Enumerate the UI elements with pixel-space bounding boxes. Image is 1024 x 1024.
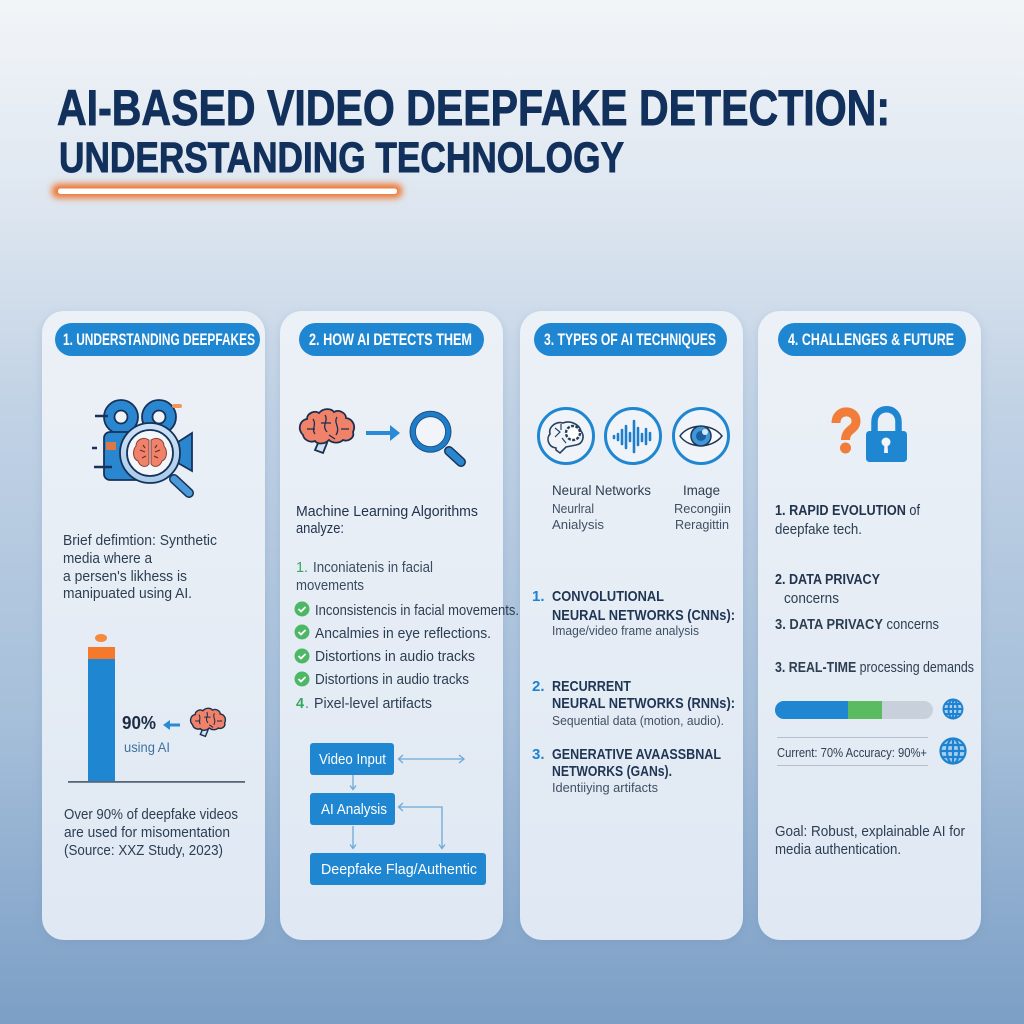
technique 1: CNNs: CONVOLUTIONAL <box>552 588 664 605</box>
intro text <box>296 504 478 537</box>
checklist: . <box>305 696 309 712</box>
goal text: Goal: Robust, explainable AI for <box>775 824 965 840</box>
list item 1: Inconiatenis in facial <box>313 560 433 576</box>
icon captions <box>552 482 731 532</box>
technique 3: GANs: NETWORKS (GANs). <box>552 763 672 780</box>
challenge list <box>775 503 974 676</box>
intro text: Machine Learning Algorithms <box>296 504 478 520</box>
definition text: Brief defimtion: Synthetic <box>63 533 217 549</box>
icon: question mark <box>836 412 856 454</box>
definition text <box>63 533 217 602</box>
panel: how AI detects them <box>280 311 519 942</box>
icon captions: Anialysis <box>552 517 605 532</box>
flow diagram: Deepfake Flag/Authentic <box>321 861 477 878</box>
list item 1: . <box>304 560 308 576</box>
checklist: Distortions in audio tracks <box>315 672 469 688</box>
heading pill 1: 1. UNDERSTANDING DEEPFAKES <box>63 331 255 349</box>
challenge list: 1. RAPID EVOLUTION of <box>775 503 921 519</box>
icon: padlock <box>866 409 907 462</box>
panel: types of AI techniques <box>520 311 743 942</box>
title: UNDERSTANDING TECHNOLOGY <box>59 134 624 182</box>
icon captions: Recongiin <box>674 501 731 516</box>
icon: eye <box>674 408 728 464</box>
statistic text <box>64 807 238 859</box>
goal text <box>775 824 965 858</box>
icon captions: Neurlral <box>552 501 594 516</box>
title <box>57 80 890 182</box>
challenge list: 3. DATA PRIVACY concerns <box>775 617 939 633</box>
icon: neural network <box>538 408 594 464</box>
technique 1: CNNs: 1. <box>532 588 545 605</box>
checklist: Inconsistencis in facial movements. <box>315 603 519 619</box>
definition text: media where a <box>63 551 153 567</box>
technique 2: RNNs <box>532 678 735 728</box>
definition text: a persen's likhess is <box>63 569 187 585</box>
accuracy progress bar <box>775 701 933 719</box>
icon captions: Reragittin <box>675 517 729 532</box>
heading pill 1 <box>55 323 260 356</box>
heading pill 2 <box>299 323 484 356</box>
flow diagram: AI Analysis <box>321 801 387 818</box>
icon: brain <box>300 409 354 453</box>
technique 3: GANs: 3. <box>532 746 545 763</box>
technique 1: CNNs: NEURAL NETWORKS (CNNs): <box>552 607 735 624</box>
icon: sound wave <box>606 408 660 464</box>
checklist: Ancalmies in eye reflections. <box>315 626 491 642</box>
icon captions: Image <box>683 482 720 498</box>
icon: video camera with magnifier and brain <box>92 400 192 493</box>
icon captions: Neural Networks <box>552 482 651 498</box>
statistic text: Over 90% of deepfake videos <box>64 807 238 823</box>
flow diagram <box>310 743 486 885</box>
arrow: brain to magnifier <box>366 425 400 441</box>
heading pill 3 <box>534 323 727 356</box>
icon: small brain <box>191 708 225 736</box>
list item 1 <box>296 560 433 594</box>
checklist: Pixel-level artifacts <box>314 696 432 712</box>
heading pill 2: 2. HOW AI DETECTS THEM <box>309 331 472 349</box>
technique 3: GANs: GENERATIVE AVAASSBNAL <box>552 746 721 763</box>
panel: challenges and future <box>758 311 981 942</box>
title underline glow <box>52 184 402 198</box>
technique 3: GANs: Identiiying artifacts <box>552 780 658 795</box>
technique 2: RNNs: Sequential data (motion, audio). <box>552 713 724 728</box>
checklist: 4 <box>296 696 304 712</box>
icon: magnifying glass <box>410 411 461 462</box>
technique 1: CNNs <box>532 588 735 638</box>
icon: globe small <box>944 700 962 718</box>
technique 2: RNNs: 2. <box>532 678 545 695</box>
intro text: analyze: <box>296 521 344 537</box>
technique 3: GANs <box>532 746 721 795</box>
technique 2: RNNs: RECURRENT <box>552 678 631 695</box>
heading pill 4 <box>778 323 966 356</box>
definition text: manipuated using AI. <box>63 586 192 602</box>
checklist: Distortions in audio tracks <box>315 649 475 665</box>
challenge list: concerns <box>784 591 839 607</box>
bar chart: 90 percent: 90% <box>122 713 156 733</box>
goal text: media authentication. <box>775 842 901 858</box>
technique 2: RNNs: NEURAL NETWORKS (RNNs): <box>552 695 735 712</box>
list item 1: movements <box>296 578 364 594</box>
statistic text: (Source: XXZ Study, 2023) <box>64 843 223 859</box>
checklist <box>294 602 519 712</box>
flow diagram: Video Input <box>319 751 387 768</box>
challenge list: deepfake tech. <box>775 522 862 538</box>
heading pill 3: 3. TYPES OF AI TECHNIQUES <box>544 331 716 349</box>
bar chart: 90 percent: using AI <box>124 739 170 755</box>
bar chart: 90 percent <box>68 634 245 783</box>
heading pill 4: 4. CHALLENGES & FUTURE <box>788 331 954 349</box>
accuracy text: Current: 70% Accuracy: 90%+ <box>777 746 927 760</box>
technique 1: CNNs: Image/video frame analysis <box>552 623 699 638</box>
list item 1: 1 <box>296 560 304 576</box>
panel: understanding deepfakes <box>42 311 265 942</box>
challenge list: 2. DATA PRIVACY <box>775 572 880 588</box>
statistic text: are used for misomentation <box>64 825 230 841</box>
icon: globe large <box>940 738 966 764</box>
challenge list: 3. REAL-TIME processing demands <box>775 660 974 676</box>
